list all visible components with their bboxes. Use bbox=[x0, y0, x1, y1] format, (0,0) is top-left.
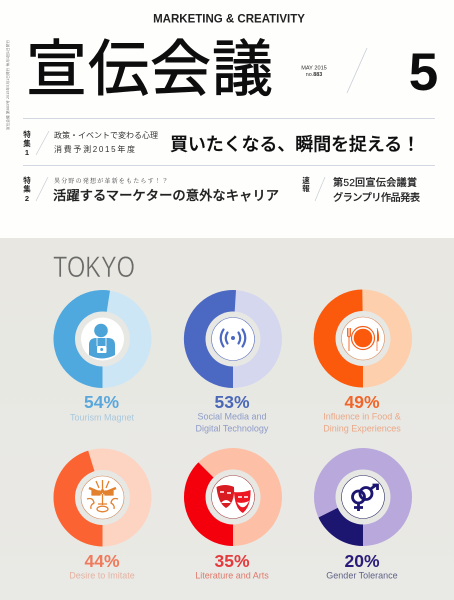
icon: tribal mask bbox=[87, 480, 118, 512]
label: food and dining bbox=[323, 412, 401, 434]
chart: desire to imitate bbox=[53, 448, 152, 580]
chart: tourism magnet bbox=[53, 290, 152, 422]
feature 1 subtitle bbox=[54, 130, 158, 154]
bulletin label: 報 bbox=[302, 183, 310, 193]
label: desire to imitate: Desire to Imitate bbox=[69, 570, 135, 580]
issue number: 5 bbox=[409, 43, 438, 102]
label: food and dining: Influence in Food & bbox=[323, 412, 401, 422]
bulletin label: 速 bbox=[302, 175, 310, 185]
feature 2 label: 特 bbox=[23, 175, 31, 185]
masthead tagline: MARKETING & CREATIVITY bbox=[153, 14, 305, 26]
value: 49%: 49% bbox=[344, 392, 380, 412]
icon: gender symbols bbox=[352, 484, 378, 511]
icon: broadcast signal bbox=[221, 330, 245, 346]
feature 2 label: 集 bbox=[23, 184, 31, 194]
chart: food and dining bbox=[314, 290, 412, 434]
chart: social media bbox=[184, 290, 282, 434]
issue date: MAY 2015 bbox=[301, 66, 327, 72]
feature 1 label: 集 bbox=[23, 138, 31, 148]
bulletin text bbox=[333, 176, 420, 204]
feature 1 subtitle: 消費予測2015年度 bbox=[54, 144, 135, 154]
feature 1 label: 特 bbox=[23, 129, 31, 139]
bulletin label bbox=[302, 175, 310, 193]
feature 2 label bbox=[23, 175, 31, 203]
issue date bbox=[301, 66, 327, 78]
feature 1 label: 1 bbox=[25, 148, 29, 157]
icon: tourist with camera bbox=[89, 324, 115, 358]
label: social media bbox=[196, 412, 269, 434]
infographic title: TOKYO bbox=[53, 251, 135, 284]
feature 1 subtitle: 政策・イベントで変わる心理 bbox=[54, 130, 158, 140]
value: 35%: 35% bbox=[214, 551, 250, 571]
bulletin text: グランプリ作品発表 bbox=[333, 191, 420, 204]
side print text: 宣伝会議 第883号 2015年5月1日発行 毎月1回1日発行 bbox=[5, 40, 10, 130]
label: social media: Social Media and bbox=[197, 412, 267, 422]
label: tourism magnet: Tourism Magnet bbox=[70, 412, 135, 422]
label: social media: Digital Technology bbox=[196, 424, 269, 434]
magazine title: 宣伝会議 bbox=[26, 19, 273, 108]
feature 1 headline: 買いたくなる、瞬間を捉える！ bbox=[170, 130, 420, 156]
infographic background panel bbox=[0, 238, 454, 600]
label: literature and arts: Literature and Arts bbox=[195, 570, 269, 580]
feature 2 label: 2 bbox=[25, 194, 29, 203]
bulletin text: 第52回宣伝会議賞 bbox=[333, 176, 417, 189]
feature 1 label bbox=[23, 129, 31, 157]
value: 20%: 20% bbox=[344, 551, 380, 571]
issue date: no.883 bbox=[306, 72, 322, 78]
value: 54%: 54% bbox=[84, 392, 119, 412]
value: 44%: 44% bbox=[84, 551, 120, 571]
label: food and dining: Dining Experiences bbox=[323, 424, 401, 434]
feature 2 subtitle: 異分野の発想が革新をもたらす！？ bbox=[54, 176, 168, 185]
value: 53%: 53% bbox=[214, 392, 250, 412]
icon: plate and cutlery bbox=[348, 326, 379, 351]
icon: theatre masks bbox=[216, 485, 251, 513]
label: gender tolerance: Gender Tolerance bbox=[326, 570, 398, 580]
feature 2 headline: 活躍するマーケターの意外なキャリア bbox=[53, 185, 279, 204]
chart: literature and arts bbox=[184, 448, 282, 580]
chart: gender tolerance bbox=[314, 448, 412, 580]
